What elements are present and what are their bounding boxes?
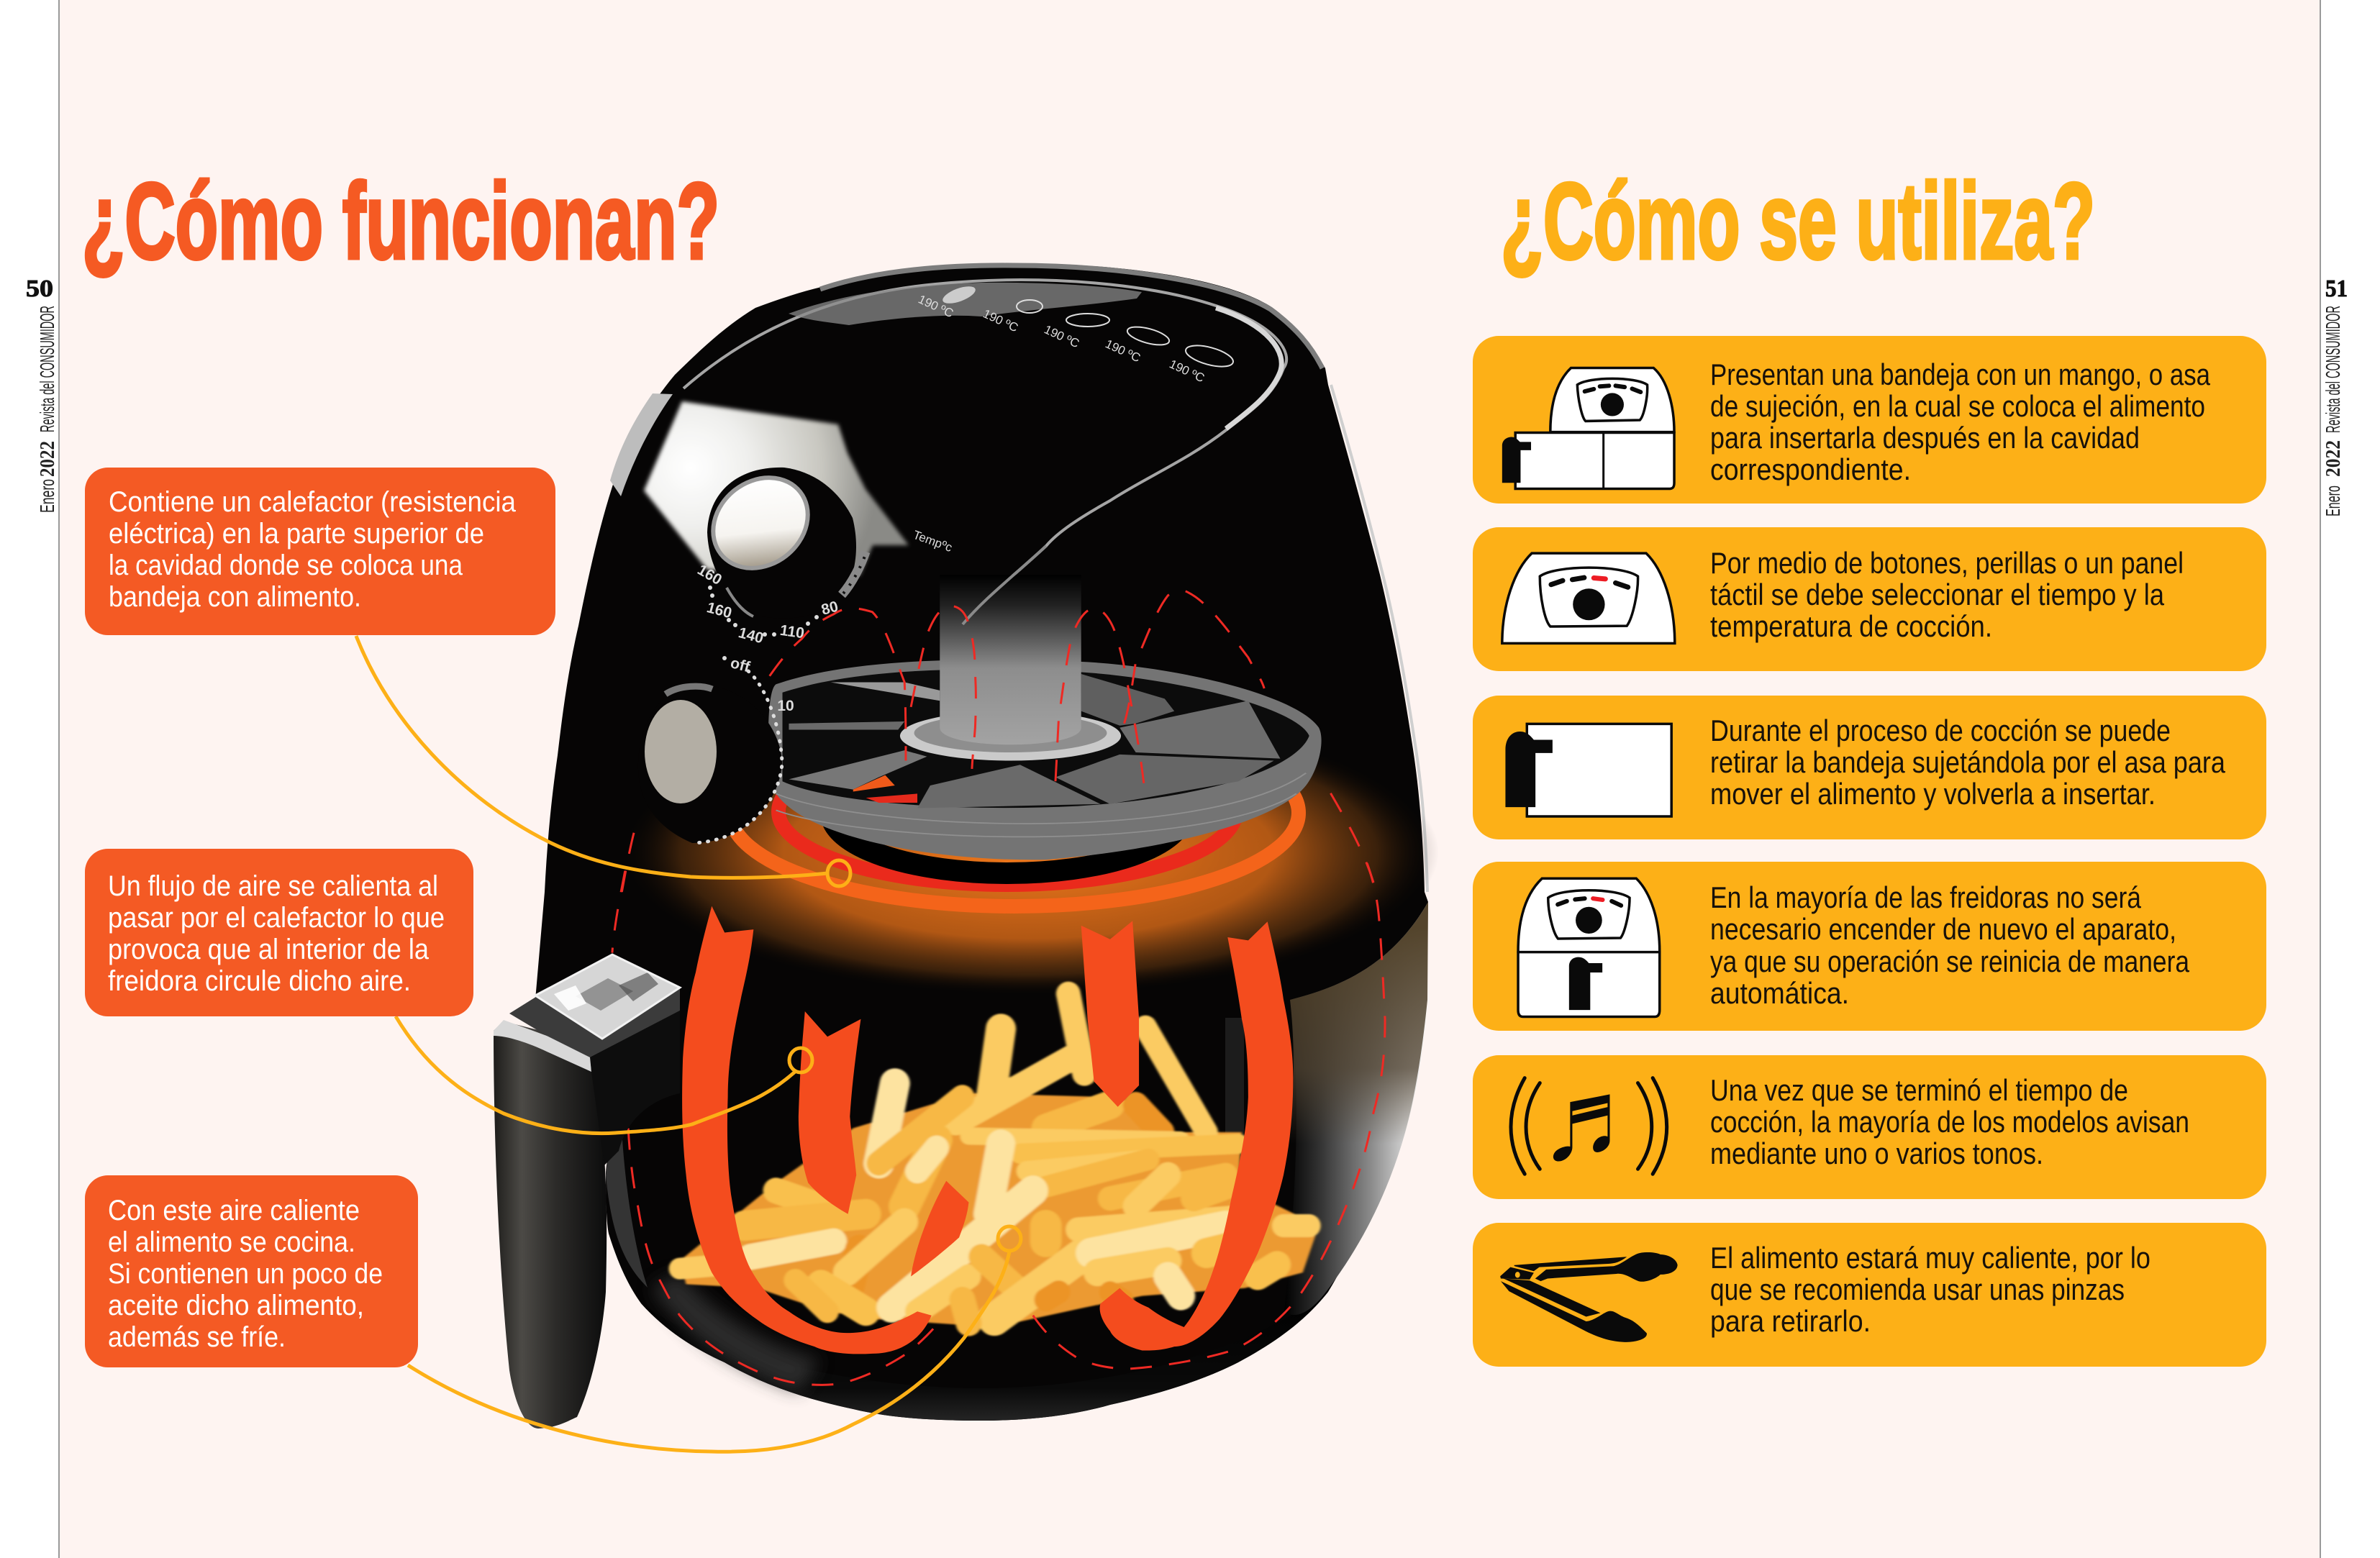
icon: tongs: [1500, 1252, 1678, 1342]
dial scale labels: 140: [737, 624, 766, 647]
text: cooking: además se fríe.: [108, 1321, 286, 1353]
text: step 2: Por medio de botones, perillas o un panel: [1710, 546, 2184, 580]
text: air flow: provoca que al interior de la: [108, 934, 430, 965]
arrow: inner left down: [799, 1011, 860, 1214]
text: step 1: para insertarla después en la cavidad: [1710, 421, 2140, 455]
title: como funcionan: ¿Cómo funcionan?: [82, 160, 719, 281]
text: cooking: Con este aire caliente: [108, 1195, 360, 1226]
lid bright edge: [1216, 308, 1281, 429]
dial scale labels: Tempºc: [912, 528, 954, 555]
glossy white reflection on dome: [644, 401, 909, 575]
right folio: page number and running head: Enero: [2322, 486, 2344, 516]
panel: step 6: [1473, 1223, 2266, 1367]
dial scale labels: 110: [779, 622, 805, 642]
top rim reflection: [820, 265, 1322, 368]
right folio: page number and running head: 51: [2325, 275, 2348, 302]
panel: heater callout: [85, 468, 555, 635]
text: heater: eléctrica) en la parte superior de: [109, 518, 484, 550]
text: air flow: [108, 870, 445, 997]
left page rule: [58, 0, 60, 1558]
dial scale labels: off: [729, 655, 753, 676]
text: step 3: [1710, 714, 2226, 811]
control panel printed labels: 190 ºC: [916, 292, 955, 320]
panel: step 3: [1473, 696, 2266, 839]
hot air arrows: [682, 906, 1293, 1354]
right page rule: [2320, 0, 2321, 1558]
leader line: cooking food: [408, 1226, 1021, 1452]
text: heater: la cavidad donde se coloca una: [109, 550, 463, 581]
control panel printed labels: 190 ºC: [1167, 357, 1207, 385]
top grey reflection on lid: [789, 283, 1142, 325]
dial scale labels: 10: [777, 698, 794, 714]
text: step 1: correspondiente.: [1710, 452, 1911, 486]
text: air flow: pasar por el calefactor lo que: [108, 902, 445, 934]
left folio: page number and running head: [26, 275, 59, 513]
text: step 2: táctil se debe seleccionar el tiempo y la: [1710, 578, 2165, 611]
icon: control panel: [1502, 553, 1675, 643]
upper right edge highlight: [1331, 385, 1427, 892]
text: step 6: [1710, 1241, 2150, 1338]
dial scale labels: [694, 528, 954, 714]
text: step 1: [1710, 357, 2211, 486]
basket side reflection: [1284, 902, 1428, 1315]
fryer body: [535, 263, 1428, 1421]
text: step 4: ya que su operación se reinicia de manera: [1710, 944, 2190, 978]
air fryer illustration: [356, 263, 1439, 1452]
text: step 1: de sujeción, en la cual se coloca el alimento: [1710, 389, 2205, 423]
lid seam line: [683, 280, 1286, 624]
text: cooking: el alimento se cocina.: [108, 1226, 355, 1258]
left folio: page number and running head: 50: [26, 275, 53, 302]
text: heater: Contiene un calefactor (resistencia: [109, 486, 517, 518]
text: step 4: necesario encender de nuevo el aparato,: [1710, 912, 2176, 946]
lower knob: [638, 671, 782, 843]
left folio: page number and running head: 2022: [37, 441, 59, 477]
right folio: page number and running head: Revista del CONSUMIDOR: [2322, 306, 2344, 433]
text: step 4: [1710, 880, 2190, 1010]
dial scale labels: 160: [705, 599, 734, 621]
text: air flow: freidora circule dicho aire.: [108, 965, 411, 997]
control panel printed labels: [916, 283, 1235, 385]
text: step 2: [1710, 546, 2184, 643]
right folio: page number and running head: [2322, 275, 2348, 516]
panel: air flow callout: [85, 849, 473, 1016]
text: heater: bandeja con alimento.: [109, 581, 361, 613]
text: cooking: aceite dicho alimento,: [108, 1290, 364, 1321]
upper knob: [695, 459, 867, 619]
basket front detail: [1225, 1018, 1244, 1147]
bottom sheen of basket: [641, 1292, 1328, 1421]
arrow: rising tail: [911, 1181, 968, 1277]
pull-out handle: [494, 955, 680, 1429]
left folio: page number and running head: Enero: [36, 479, 58, 513]
text: step 6: que se recomienda usar unas pinzas: [1710, 1272, 2125, 1306]
icon: closed fryer: [1518, 878, 1660, 1016]
text: air flow: Un flujo de aire se calienta al: [108, 870, 438, 902]
arrow: large left U: [682, 906, 932, 1354]
panel: step 1: [1473, 336, 2266, 504]
text: step 5: cocción, la mayoría de los modelos avisan: [1710, 1105, 2189, 1139]
icon: music note with sound waves: [1511, 1078, 1667, 1174]
basket left side sheen: [606, 1128, 648, 1288]
arrow: right centre down: [1081, 921, 1139, 1107]
leader line: heater: [356, 636, 850, 886]
text: step 2: temperatura de cocción.: [1710, 609, 1992, 643]
fan basket: [768, 575, 1322, 860]
text: heater: [109, 486, 517, 613]
glow of heater: [619, 709, 1439, 996]
dial scale labels: 160: [694, 562, 725, 588]
left rim reflection: [610, 393, 673, 496]
left folio: page number and running head: Revista del CONSUMIDOR: [36, 306, 58, 432]
control panel printed labels: 190 ºC: [1042, 322, 1081, 350]
leader line: air flow: [396, 1016, 812, 1134]
text: step 6: para retirarlo.: [1710, 1304, 1871, 1338]
lid curve over shaft: [963, 546, 1046, 624]
text: step 5: Una vez que se terminó el tiempo de: [1710, 1073, 2128, 1107]
control panel printed labels: 190 ºC: [1103, 337, 1143, 365]
panel: step 4: [1473, 862, 2266, 1031]
heating element rings: [730, 719, 1299, 906]
text: cooking: Si contienen un poco de: [108, 1258, 383, 1290]
lower left grey sheen: [651, 1273, 820, 1392]
dial scale labels: 80: [819, 598, 840, 619]
text: step 1: Presentan una bandeja con un mango, o asa: [1710, 357, 2211, 391]
text: cooking: [108, 1195, 383, 1353]
text: step 5: mediante uno o varios tonos.: [1710, 1136, 2043, 1170]
french fries: [680, 994, 1319, 1327]
text: step 3: mover el alimento y volverla a insertar.: [1710, 777, 2156, 811]
text: step 3: Durante el proceso de cocción se puede: [1710, 714, 2171, 747]
panel: cooking callout: [85, 1175, 418, 1367]
text: step 5: [1710, 1073, 2189, 1170]
icon: tray with handle: [1505, 724, 1671, 816]
basket seam reflection band: [1288, 902, 1428, 1151]
red dashed air flow lines: [612, 591, 1385, 1385]
text: step 6: El alimento estará muy caliente, por lo: [1710, 1241, 2150, 1275]
text: step 3: retirar la bandeja sujetándola por el asa para: [1710, 745, 2226, 779]
text: step 4: automática.: [1710, 976, 1849, 1010]
arrow: large right U: [1100, 921, 1293, 1351]
right folio: page number and running head: 2022: [2322, 440, 2345, 477]
control panel printed labels: 190 ºC: [981, 306, 1020, 334]
panel: step 5: [1473, 1055, 2266, 1199]
panel: step 2: [1473, 527, 2266, 671]
icon: fryer with tray inserted: [1502, 368, 1674, 489]
text: step 4: En la mayoría de las freidoras no será: [1710, 880, 2142, 914]
